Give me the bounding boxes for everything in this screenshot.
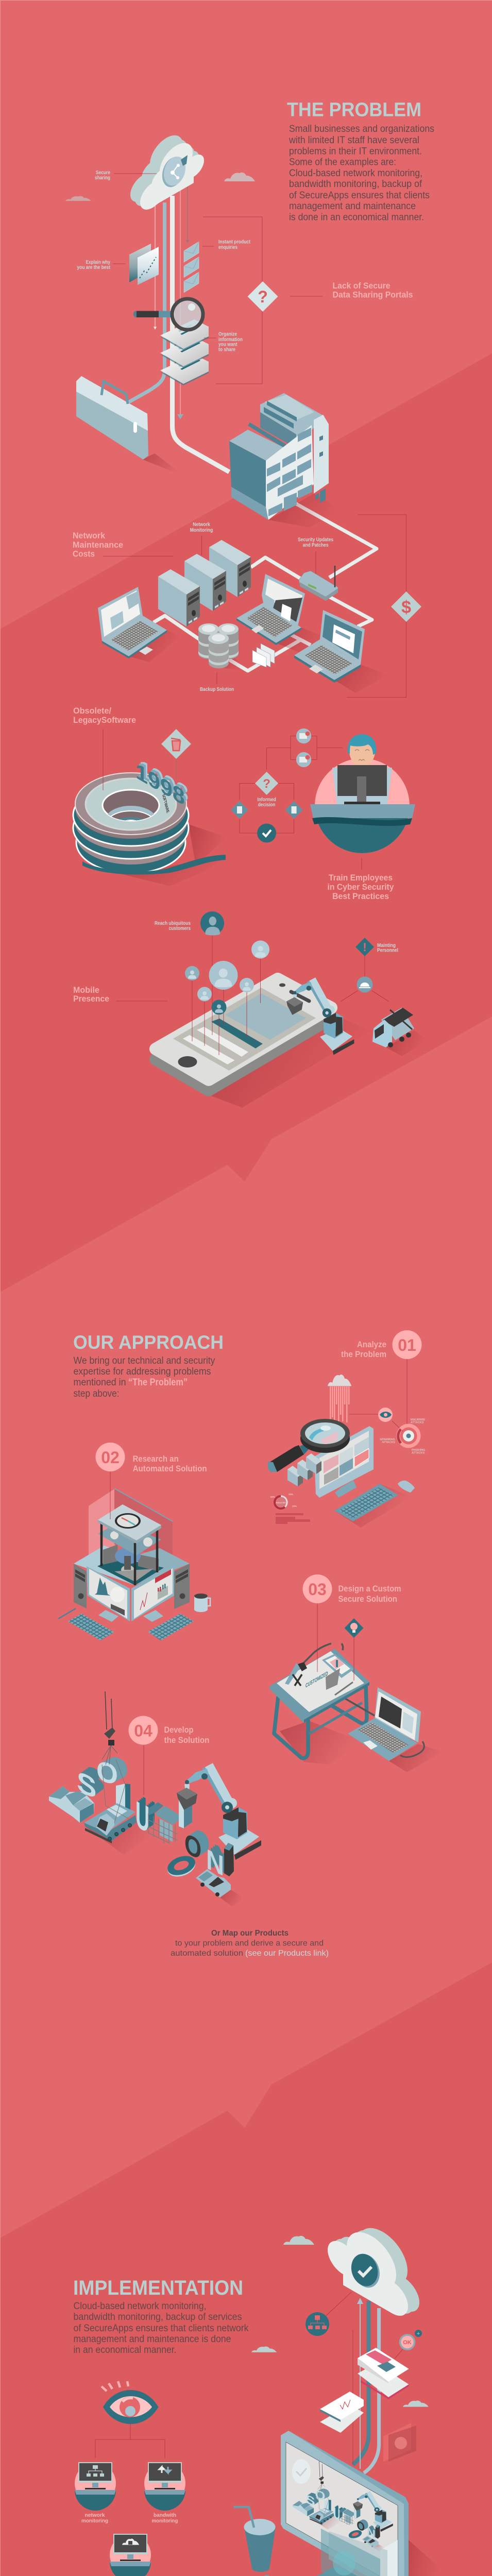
label: network maintenance costs <box>73 531 173 559</box>
label: secure sharing: sharing <box>95 175 110 181</box>
tape reel <box>73 773 227 886</box>
icon: customer avatars <box>185 911 269 1015</box>
text block: problem description: with limited IT staff have several <box>289 134 419 146</box>
label: explain why: Explain why <box>86 260 110 265</box>
callout: train employees: Best Practices <box>332 892 389 901</box>
icon: secure cloud <box>130 122 204 215</box>
label: organize information: you want <box>218 342 237 347</box>
label: bandwith monitoring: bandwith <box>154 2513 176 2518</box>
connector: trash <box>176 759 177 779</box>
pipes and arrows to cloud <box>353 2301 379 2473</box>
text block: problem description: Cloud-based network monitoring, <box>289 167 422 179</box>
step 03: badge: 03 <box>308 1580 327 1599</box>
label: bandwith monitoring: monitoring <box>151 2518 178 2524</box>
step 04: badge: 04 <box>134 1722 152 1740</box>
icon: drink cup <box>234 2507 276 2572</box>
step 03: illustration: CUSTOMIZED <box>306 1670 328 1689</box>
icon: implementation cloud <box>328 2207 419 2323</box>
step 01: illustration <box>268 1375 415 1528</box>
text block: implementation description: management and maintenance is done <box>73 2333 231 2345</box>
icon: eye <box>101 2381 159 2424</box>
icon: informed decision diamond <box>255 772 278 795</box>
pipes from cloud <box>127 187 229 472</box>
laptop: middle <box>236 574 330 654</box>
callout: lack of secure data sharing portals: Data Sharing Portals <box>333 291 413 300</box>
text: year 1998: 1998 <box>139 754 189 807</box>
label: network monitoring: Monitoring <box>190 528 213 533</box>
label: network monitoring <box>190 522 213 555</box>
step 02: heading: Research an <box>133 1454 179 1464</box>
step 02: badge <box>96 1443 125 1471</box>
building <box>229 393 343 528</box>
icon: dollar diamond: $ <box>401 598 411 617</box>
label: informed decision <box>257 797 276 808</box>
icon: page alert <box>296 752 311 767</box>
icon: robot arm <box>286 977 354 1055</box>
label: informed decision: decision <box>258 802 275 808</box>
icon: trash diamond <box>161 729 191 759</box>
text block: approach description <box>73 1355 215 1399</box>
icon: mail alert <box>296 728 311 743</box>
label: reach ubiquitous customers <box>155 921 191 931</box>
keyboard <box>227 2574 397 2576</box>
labels: attacks: ATTACKS <box>382 1441 395 1444</box>
step 03: heading <box>338 1584 401 1604</box>
label: mainting personnel: Personnel <box>377 948 398 953</box>
icon: check circle <box>257 823 276 843</box>
step 01: heading: Analyze <box>357 1340 386 1349</box>
labels: attacks: PHISHING <box>412 1449 426 1452</box>
label: bandwith monitoring <box>151 2513 178 2524</box>
icon: briefcase <box>76 376 185 477</box>
text block: problem description: is done in an economical manner. <box>289 211 424 223</box>
router <box>299 566 338 601</box>
callout: lack of secure data sharing portals <box>290 281 413 300</box>
icon: bulb diamond <box>344 1618 364 1638</box>
labels: attacks: ATTACKS <box>411 1421 424 1424</box>
text block: approach description: “The Problem” <box>128 1377 188 1388</box>
label: instant product enquiries <box>202 239 251 250</box>
chart: analysis donut: 30% <box>289 1493 293 1496</box>
label: mobile presence: Mobile <box>73 986 99 995</box>
label: network monitoring: Network <box>193 522 210 528</box>
step 01: heading <box>341 1340 386 1359</box>
label: network maintenance costs: Maintenance <box>73 540 123 550</box>
icon: ok button: OK <box>403 2340 412 2346</box>
icon: watching eye <box>378 1408 393 1422</box>
text block: problem description: bandwidth monitoring, backup of <box>289 178 422 190</box>
label: network maintenance costs: Network <box>73 531 106 540</box>
label: organize information: information <box>218 337 243 343</box>
callout: lack of secure data sharing portals: Lack of Secure <box>333 281 391 291</box>
step 03: heading: Secure Solution <box>338 1595 397 1604</box>
label: obsolete legacy software: LegacySoftware <box>73 716 136 725</box>
laptop: left <box>98 587 180 662</box>
step 04: badge <box>129 1716 158 1744</box>
label: network monitoring: network <box>84 2513 105 2518</box>
step 02: badge: 02 <box>101 1448 120 1467</box>
illustration: employee at computer <box>310 734 415 853</box>
icon: bandwidth monitoring <box>144 2462 185 2511</box>
customer drop lines <box>192 935 261 1055</box>
label: obsolete legacy software <box>73 706 136 725</box>
text block: implementation description: in an economical manner. <box>73 2344 176 2355</box>
text block: problem description: problems in their IT environment. <box>289 145 422 157</box>
text block: approach description: We bring our technical and security <box>73 1355 215 1366</box>
text block: problem description: management and maintenance <box>289 200 416 212</box>
connector: personnel <box>341 956 389 1002</box>
text block: map our products: Or Map our Products <box>211 1929 289 1938</box>
text block: implementation description: Cloud-based network monitoring, <box>73 2300 206 2312</box>
label: explain why: you are the best <box>77 265 111 270</box>
faded panel <box>383 2423 416 2462</box>
label: instant product enquiries: enquiries <box>218 245 237 250</box>
bracket: maintenance cost <box>347 515 406 698</box>
tape reel: SOFTWARE <box>161 793 170 814</box>
icon: dollar diamond <box>391 591 421 622</box>
label: mainting personnel <box>377 943 398 953</box>
icon: question diamond <box>247 281 278 312</box>
step 01: heading: the Problem <box>341 1350 386 1359</box>
icon: arrowhead up <box>357 2298 363 2304</box>
step 02: illustration <box>58 1488 210 1640</box>
callout: train employees <box>328 858 394 901</box>
icon: dump truck <box>372 1008 428 1056</box>
icon: alert diamond <box>355 938 374 956</box>
icon: alert diamond: ! <box>363 941 367 954</box>
labels: attacks: MALWARE <box>411 1418 425 1421</box>
label: network monitoring: monitoring <box>81 2518 108 2524</box>
text block: problem description <box>289 123 434 223</box>
chart: analysis donut: 60% <box>270 1496 275 1498</box>
text block: map our products <box>171 1929 329 1958</box>
labels: attacks: SPAMMING <box>380 1438 395 1442</box>
icon: backup of services <box>110 2534 151 2576</box>
step 01: badge: 01 <box>398 1336 416 1354</box>
step 04: heading <box>164 1725 209 1745</box>
text: year 1998 <box>135 754 189 810</box>
laptop: right <box>294 610 389 693</box>
icon: question diamond: ? <box>258 287 268 306</box>
text block: approach description: step above: <box>73 1388 120 1399</box>
text block: approach description: expertise for addressing problems <box>73 1366 211 1377</box>
network cables <box>154 504 377 671</box>
flow connectors <box>240 736 343 833</box>
step 03: illustration <box>269 1643 443 1772</box>
label: mobile presence: Presence <box>73 994 109 1004</box>
text block: map our products: (see our Products link) <box>245 1949 329 1958</box>
chart: analysis donut: 20% <box>292 1505 297 1507</box>
icon: small clouds <box>251 2236 429 2407</box>
icon: small cloud left <box>65 196 91 201</box>
label: informed decision: Informed <box>257 797 276 803</box>
label: organize information: to share <box>218 347 235 352</box>
label: reach ubiquitous customers: customers <box>169 926 191 931</box>
label: backup solution <box>200 672 234 692</box>
database cylinders <box>198 623 247 671</box>
label: security updates and patches <box>298 537 333 579</box>
icon: document stack <box>252 643 275 667</box>
background band: dark implementation section <box>0 1962 492 2576</box>
icon: magnifier <box>133 299 203 330</box>
callout: train employees: in Cyber Security <box>328 883 394 892</box>
text: year 1998: 1998 <box>135 758 185 810</box>
callout: train employees: Train Employees <box>329 873 393 883</box>
icon: ok button <box>400 2330 422 2349</box>
step 02: heading <box>133 1454 207 1473</box>
label: explain why <box>77 260 125 270</box>
label: secure sharing: Secure <box>96 170 110 176</box>
text: year 1998: 1998 <box>138 756 187 808</box>
text block: map our products: automated solution <box>171 1949 243 1958</box>
connector: obsolete software <box>103 729 104 790</box>
label: obsolete legacy software: Obsolete/ <box>73 706 111 716</box>
step 03: badge <box>303 1574 332 1603</box>
label: backup solution: Backup Solution <box>200 687 234 692</box>
text block: map our products: to your problem and derive a secure and <box>175 1939 324 1947</box>
label: secure sharing <box>95 170 157 181</box>
label: security updates and patches: and Patches <box>303 543 329 548</box>
chart: analysis donut <box>270 1493 310 1524</box>
monitor with solution <box>281 2431 443 2576</box>
documents: right stack <box>358 2348 409 2399</box>
icon: org chart circle <box>306 2312 329 2336</box>
labels: attacks <box>380 1418 426 1455</box>
icon: small cloud right <box>224 173 255 181</box>
title: implementation: IMPLEMENTATION <box>73 2277 243 2299</box>
icon: envelopes <box>184 242 199 293</box>
label: security updates and patches: Security Updates <box>298 537 333 543</box>
title: the problem: THE PROBLEM <box>287 99 421 121</box>
label: mobile presence <box>73 986 167 1004</box>
label: organize information: Organize <box>218 332 237 337</box>
label: mainting personnel: Mainting <box>377 943 396 948</box>
icon: helmet <box>357 977 373 992</box>
text block: problem description: of SecureApps ensures that clients <box>289 190 430 201</box>
step 01: badge <box>393 1330 421 1359</box>
icon: ok button: + <box>417 2331 420 2337</box>
labels: attacks: ATTACKS <box>412 1452 425 1455</box>
chart: analysis donut: ANALYSIS <box>276 1501 286 1504</box>
label: organize information <box>204 332 243 352</box>
text block: implementation description: bandwidth monitoring, backup of services <box>73 2311 242 2323</box>
text block: problem description: Some of the examples are: <box>289 157 396 168</box>
step 04: illustration <box>49 1691 261 1906</box>
step 04: heading: Develop <box>164 1725 194 1735</box>
icon: clipboard right <box>285 801 303 819</box>
label: reach ubiquitous customers: Reach ubiquitous <box>155 921 191 926</box>
text block: approach description: mentioned in <box>73 1377 126 1388</box>
title: our approach: OUR APPROACH <box>73 1332 224 1353</box>
step 03: heading: Design a Custom <box>338 1584 401 1594</box>
chart cards: explain why <box>129 244 159 285</box>
icon: informed decision diamond: ? <box>263 777 270 791</box>
icon: clipboard left <box>231 801 248 819</box>
server towers <box>158 540 251 626</box>
icon: network monitoring <box>75 2462 116 2511</box>
background band: dark problem section <box>0 353 492 1292</box>
icon: bug threat ring <box>398 1426 419 1446</box>
step 02: heading: Automated Solution <box>133 1464 207 1473</box>
step 04: heading: the Solution <box>164 1736 209 1745</box>
label: network monitoring <box>81 2513 108 2524</box>
text block: implementation description: of SecureApps ensures that clients network <box>73 2323 249 2334</box>
bracket: data sharing <box>203 217 262 384</box>
illustration: mobile phone <box>156 979 371 1108</box>
text block: implementation description <box>73 2300 249 2355</box>
label: instant product enquiries: Instant product <box>218 239 251 245</box>
documents stack <box>160 319 209 385</box>
text block: problem description: Small businesses and organizations <box>289 123 434 134</box>
label: network maintenance costs: Costs <box>73 550 95 559</box>
documents: left stack <box>320 2392 364 2433</box>
